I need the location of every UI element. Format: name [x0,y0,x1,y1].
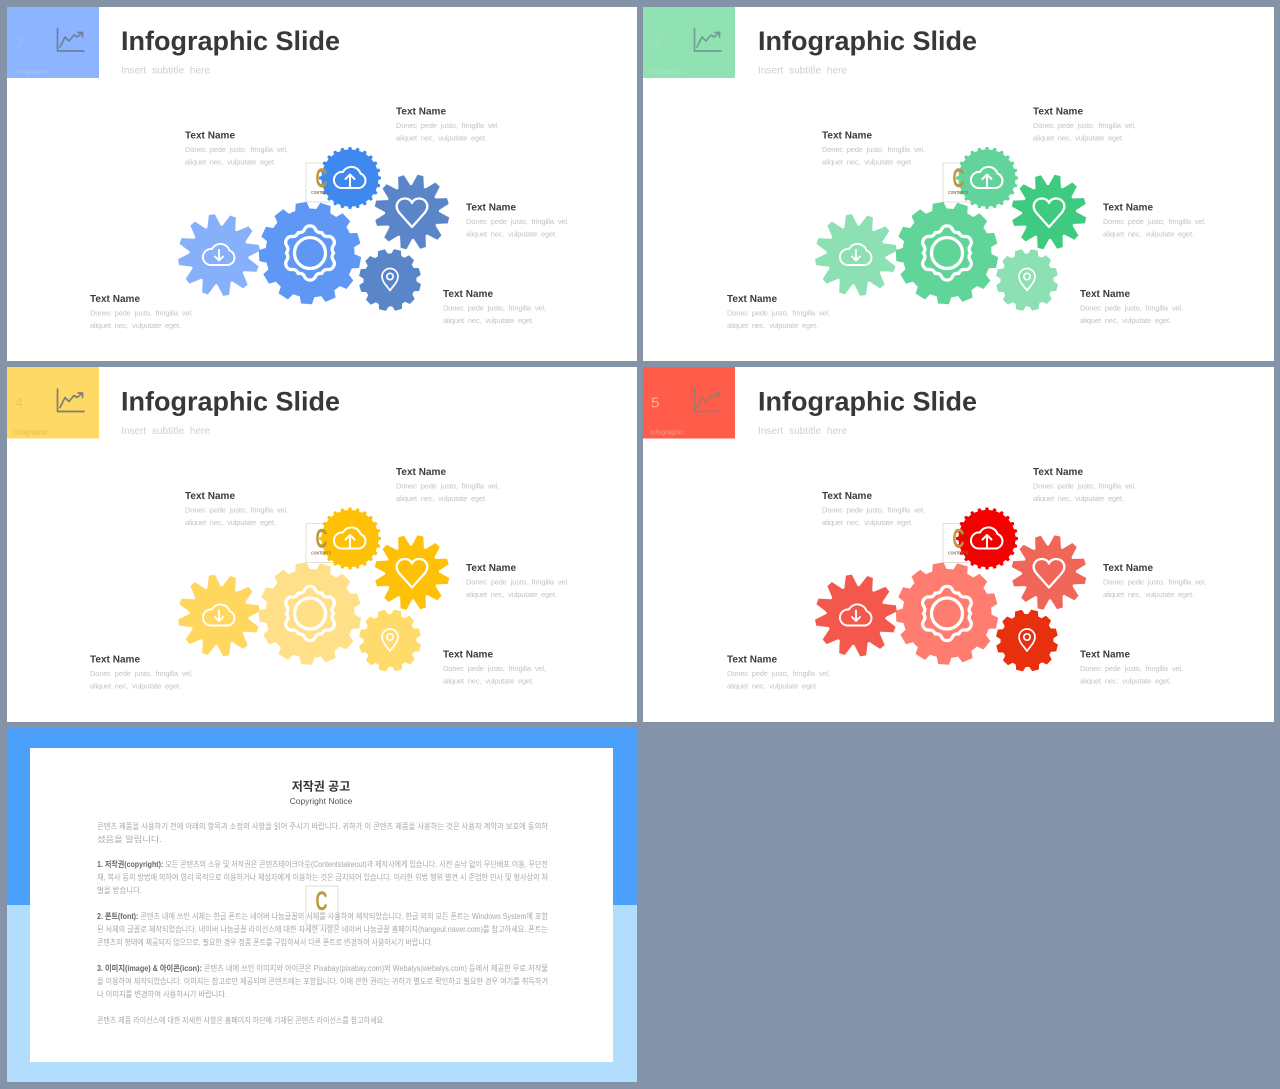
text block: top [1033,106,1136,142]
text block: copyright clause: 1. 저작권(copyright): 모든 콘텐츠의 소유 및 저작권은 콘텐츠테이크아웃(Contentstakeout)과 제작사에게 있습니다. 사전 승낙 없이 무단배포 이용, 무단전 [97,859,548,869]
text block: lower right [443,650,546,686]
watermark logo [948,524,968,556]
text block: top: Text Name [1033,467,1083,478]
watermark logo: C [316,886,328,916]
tile: slide number and chart icon [643,367,735,438]
text block: lower left: aliquet nec, vulputate eget. [727,321,818,330]
text block: lower right: aliquet nec, vulputate eget. [443,316,534,325]
text block: lower right: Text Name [443,650,493,660]
text block: upper left [822,491,925,527]
text block: right: aliquet nec, vulputate eget. [466,590,557,599]
text block: upper left: Donec pede justo, fringilla vel, [185,506,288,514]
text block: lower left: aliquet nec, vulputate eget. [727,682,818,690]
watermark logo: C [316,163,328,193]
text block: right: Donec pede justo, fringilla vel, [1103,578,1206,586]
text block: upper left [822,130,925,166]
text block: lower left: Text Name [90,654,140,666]
gear: heart [374,534,450,611]
watermark logo [306,886,338,925]
text block: upper left: Text Name [185,130,235,142]
watermark box [306,524,338,562]
text block: lower right: Text Name [443,289,493,300]
text block: upper left [185,130,288,166]
text block: right [1103,202,1206,238]
gears cluster [814,147,1087,311]
text block: right: Donec pede justo, fringilla vel, [1103,217,1206,226]
tile: slide number and chart icon: 3 [652,34,660,51]
panel: copyright notice [7,728,637,1082]
heading: copyright notice: Copyright Notice [290,796,353,806]
subtitle: Insert subtitle here [758,426,847,437]
title: Infographic Slide [121,386,340,416]
watermark logo [311,524,331,556]
text block: lower left [90,654,193,690]
tile: slide number and chart icon: 2 [15,34,23,51]
text block: lower left: Donec pede justo, fringilla vel, [727,308,830,318]
text block: top: aliquet nec, vulputate eget. [1033,134,1124,142]
text block: top: Donec pede justo, fringilla vel, [396,121,499,130]
subtitle: Insert subtitle here [121,426,210,437]
text block: right: Text Name [466,563,516,574]
text block: lower left: Text Name [90,294,140,305]
gear: location pin [359,249,421,311]
text block: lower left: Text Name [727,294,777,305]
gear: heart [1011,174,1087,250]
watermark box [306,163,338,202]
panel: blue slide [7,7,637,361]
text block: right: aliquet nec, vulputate eget. [466,230,557,238]
tile: slide number and chart icon [643,7,735,78]
text block: lower left: Text Name [727,654,777,666]
text block: upper left: aliquet nec, vulputate eget. [185,158,276,166]
text block: lower right: Text Name [1080,289,1130,300]
text block: lower right: Donec pede justo, fringilla vel, [1080,304,1183,312]
tile: slide number and chart icon: Infographic [14,430,48,436]
text block: right [466,202,569,238]
text block: top [1033,467,1136,503]
text block: upper left: Text Name [185,491,235,502]
tile: slide number and chart icon: 4 [15,394,23,412]
watermark box [943,163,975,202]
text block: right [466,563,569,599]
tile: slide number and chart icon: 5 [651,394,659,412]
text block: lower right [443,289,546,325]
text block: top: aliquet nec, vulputate eget. [396,134,487,142]
gear: settings center [259,201,362,304]
watermark logo: CONTENTS [948,190,968,195]
text block: font clause [97,911,549,947]
text block: lower right [1080,650,1183,686]
watermark logo: C [952,524,964,554]
text block: lower right: Donec pede justo, fringilla vel, [443,664,546,673]
text block: right: aliquet nec, vulputate eget. [1103,590,1194,599]
text block: top: Text Name [396,467,446,478]
text block: copyright clause [97,859,548,895]
text block: intro [97,821,549,844]
tile: slide number and chart icon [7,7,99,78]
tile: slide number and chart icon: Infographic [650,430,684,436]
text block: upper left: Donec pede justo, fringilla vel, [185,145,288,154]
text block: copyright clause: 벌을 받습니다. [97,885,142,895]
text block: license note: 콘텐츠 제품 라이선스에 대한 자세한 사항은 홈페이지 하단에 기재된 콘텐츠 라이선스를 참고하세요. [97,1015,385,1025]
text block: upper left: aliquet nec, vulputate eget. [822,158,913,166]
gear: settings center [896,562,999,665]
text block: right [1103,563,1206,599]
tile: slide number and chart icon [7,367,99,438]
watermark logo: CONTENTS [311,550,331,556]
text block: upper left [185,491,288,527]
text block: right: aliquet nec, vulputate eget. [1103,230,1194,238]
gear: cloud upload [956,508,1018,570]
text block: right: Text Name [466,202,516,214]
text block: font clause: 2. 폰트(font): 콘텐츠 내에 쓰인 서체는 한글 폰트는 네이버 나눔글꼴의 서체를 사용하여 제작되었습니다. 한글 외의 모든 폰트는 Windows System에 포함 [97,911,549,921]
gear: settings center [896,201,999,304]
title: Infographic Slide [758,386,977,416]
watermark logo: C [316,524,328,554]
title: Infographic Slide [758,26,977,56]
gear: cloud upload [319,147,381,209]
gear: cloud download [814,574,898,657]
gears cluster [177,147,450,311]
text block: intro: 콘텐츠 제품을 사용하기 전에 아래의 항목과 소정의 사항을 읽어 주시기 바랍니다. 귀하가 이 콘텐츠 제품을 사용하는 것은 사용자 계약과 보호에 동의하 [97,821,549,831]
gear: location pin [996,609,1058,672]
text block: right: Donec pede justo, fringilla vel, [466,578,569,586]
text block: image clause: 나 이미지를 변경하여 사용하시기 바랍니다. [97,989,227,999]
gear: cloud download [177,574,261,657]
watermark logo [948,163,968,195]
text block: lower left [90,294,193,330]
watermark box [943,524,975,562]
gear: heart [1011,534,1087,611]
watermark logo: C [952,163,964,193]
text block: lower left: Donec pede justo, fringilla vel, [90,308,193,318]
panel: green slide [643,7,1274,361]
text block: lower right: Donec pede justo, fringilla vel, [1080,664,1183,673]
text block: upper left: aliquet nec, vulputate eget. [822,518,913,527]
text block: top: Text Name [396,106,446,118]
text block: lower left: Donec pede justo, fringilla vel, [90,669,193,678]
panel: yellow slide [7,367,637,722]
text block: top: Donec pede justo, fringilla vel, [1033,482,1136,490]
text block: upper left: Text Name [822,491,872,502]
text block: top: Text Name [1033,106,1083,118]
heading: copyright notice [290,778,353,806]
text block: right: Donec pede justo, fringilla vel, [466,217,569,226]
text block: lower right: aliquet nec, vulputate eget. [1080,316,1171,325]
text block: lower left: aliquet nec, vulputate eget. [90,321,181,330]
text block: top: aliquet nec, vulputate eget. [396,494,487,503]
text block: lower right: aliquet nec, vulputate eget. [1080,676,1171,686]
text block: right: Text Name [1103,202,1153,214]
text block: intro: 셨음을 알립니다. [97,834,162,844]
text block: upper left: aliquet nec, vulputate eget. [185,518,276,527]
text block: top [396,106,499,142]
text block: lower left [727,654,830,690]
text block: image clause: 을 이용하여 제작되었습니다. 이미지는 참고로만 제공되며 콘텐츠에는 포함됩니다. 이에 관한 권리는 귀하가 별도로 확인하고 필요한 경우 여기를 취득하거 [97,976,548,986]
subtitle: Insert subtitle here [121,66,210,76]
gears cluster [814,508,1087,672]
text block: copyright clause: 재, 복사 등의 방법에 의하여 영리 목적으로 이용하거나 제삼자에게 이용하는 것은 금지되어 있습니다. 이러한 위법 행위 발견 시 준엄한 민사 및 형사상의 처 [97,872,548,882]
text block: top: aliquet nec, vulputate eget. [1033,494,1124,503]
text block: top: Donec pede justo, fringilla vel, [1033,121,1136,130]
subtitle: Insert subtitle here [758,66,847,76]
text block: lower right: Donec pede justo, fringilla vel, [443,304,546,312]
gear: cloud upload [956,147,1018,209]
text block: font clause: 콘텐츠의 형태에 제공되지 않으므로, 필요한 경우 정품 폰트를 구입하셔서 다른 폰트로 변경하여 사용하시기 바랍니다. [97,937,433,947]
text block: lower right: Text Name [1080,650,1130,660]
watermark logo: CONTENTS [311,190,331,195]
gear: settings center [259,562,362,665]
gear: location pin [359,609,421,672]
title: Infographic Slide [121,26,340,56]
tile: slide number and chart icon: Infographic [650,69,684,76]
text block: lower left: aliquet nec, vulputate eget. [90,682,181,690]
gear: cloud download [814,213,898,297]
text block: lower left: Donec pede justo, fringilla vel, [727,669,830,678]
text block: lower right: aliquet nec, vulputate eget. [443,676,534,686]
text block: top [396,467,499,503]
heading: copyright notice: 저작권 공고 [292,778,350,794]
gear: location pin [996,249,1058,311]
text block: image clause: 3. 이미지(image) & 아이콘(icon): 콘텐츠 내에 쓰인 이미지와 아이콘은 Pixabay(pixabay.com)와 Webalys(webalys.com) 등에서 제공한 무료 저작물 [97,963,548,973]
text block: image clause [97,963,548,999]
text block: upper left: Donec pede justo, fringilla vel, [822,145,925,154]
text block: lower left [727,294,830,330]
text block: top: Donec pede justo, fringilla vel, [396,482,499,490]
gear: heart [374,174,450,250]
text block: upper left: Text Name [822,130,872,142]
tile: slide number and chart icon: Infographic [14,69,48,76]
gear: cloud download [177,213,261,297]
text block: right: Text Name [1103,563,1153,574]
text block: upper left: Donec pede justo, fringilla vel, [822,506,925,514]
text block: font clause: 된 서체의 글꼴로 제작되었습니다. 네이버 나눔글꼴 라이선스에 대한 자세한 사항은 네이버 나눔글꼴 홈페이지(hangeul.naver.com)를 참고하세요. 폰트는 [97,924,548,934]
text block: lower right [1080,289,1183,325]
panel: red slide [643,367,1274,722]
watermark logo [311,163,331,195]
gear: cloud upload [319,508,381,570]
watermark logo: CONTENTS [948,550,968,556]
gears cluster [177,508,450,672]
